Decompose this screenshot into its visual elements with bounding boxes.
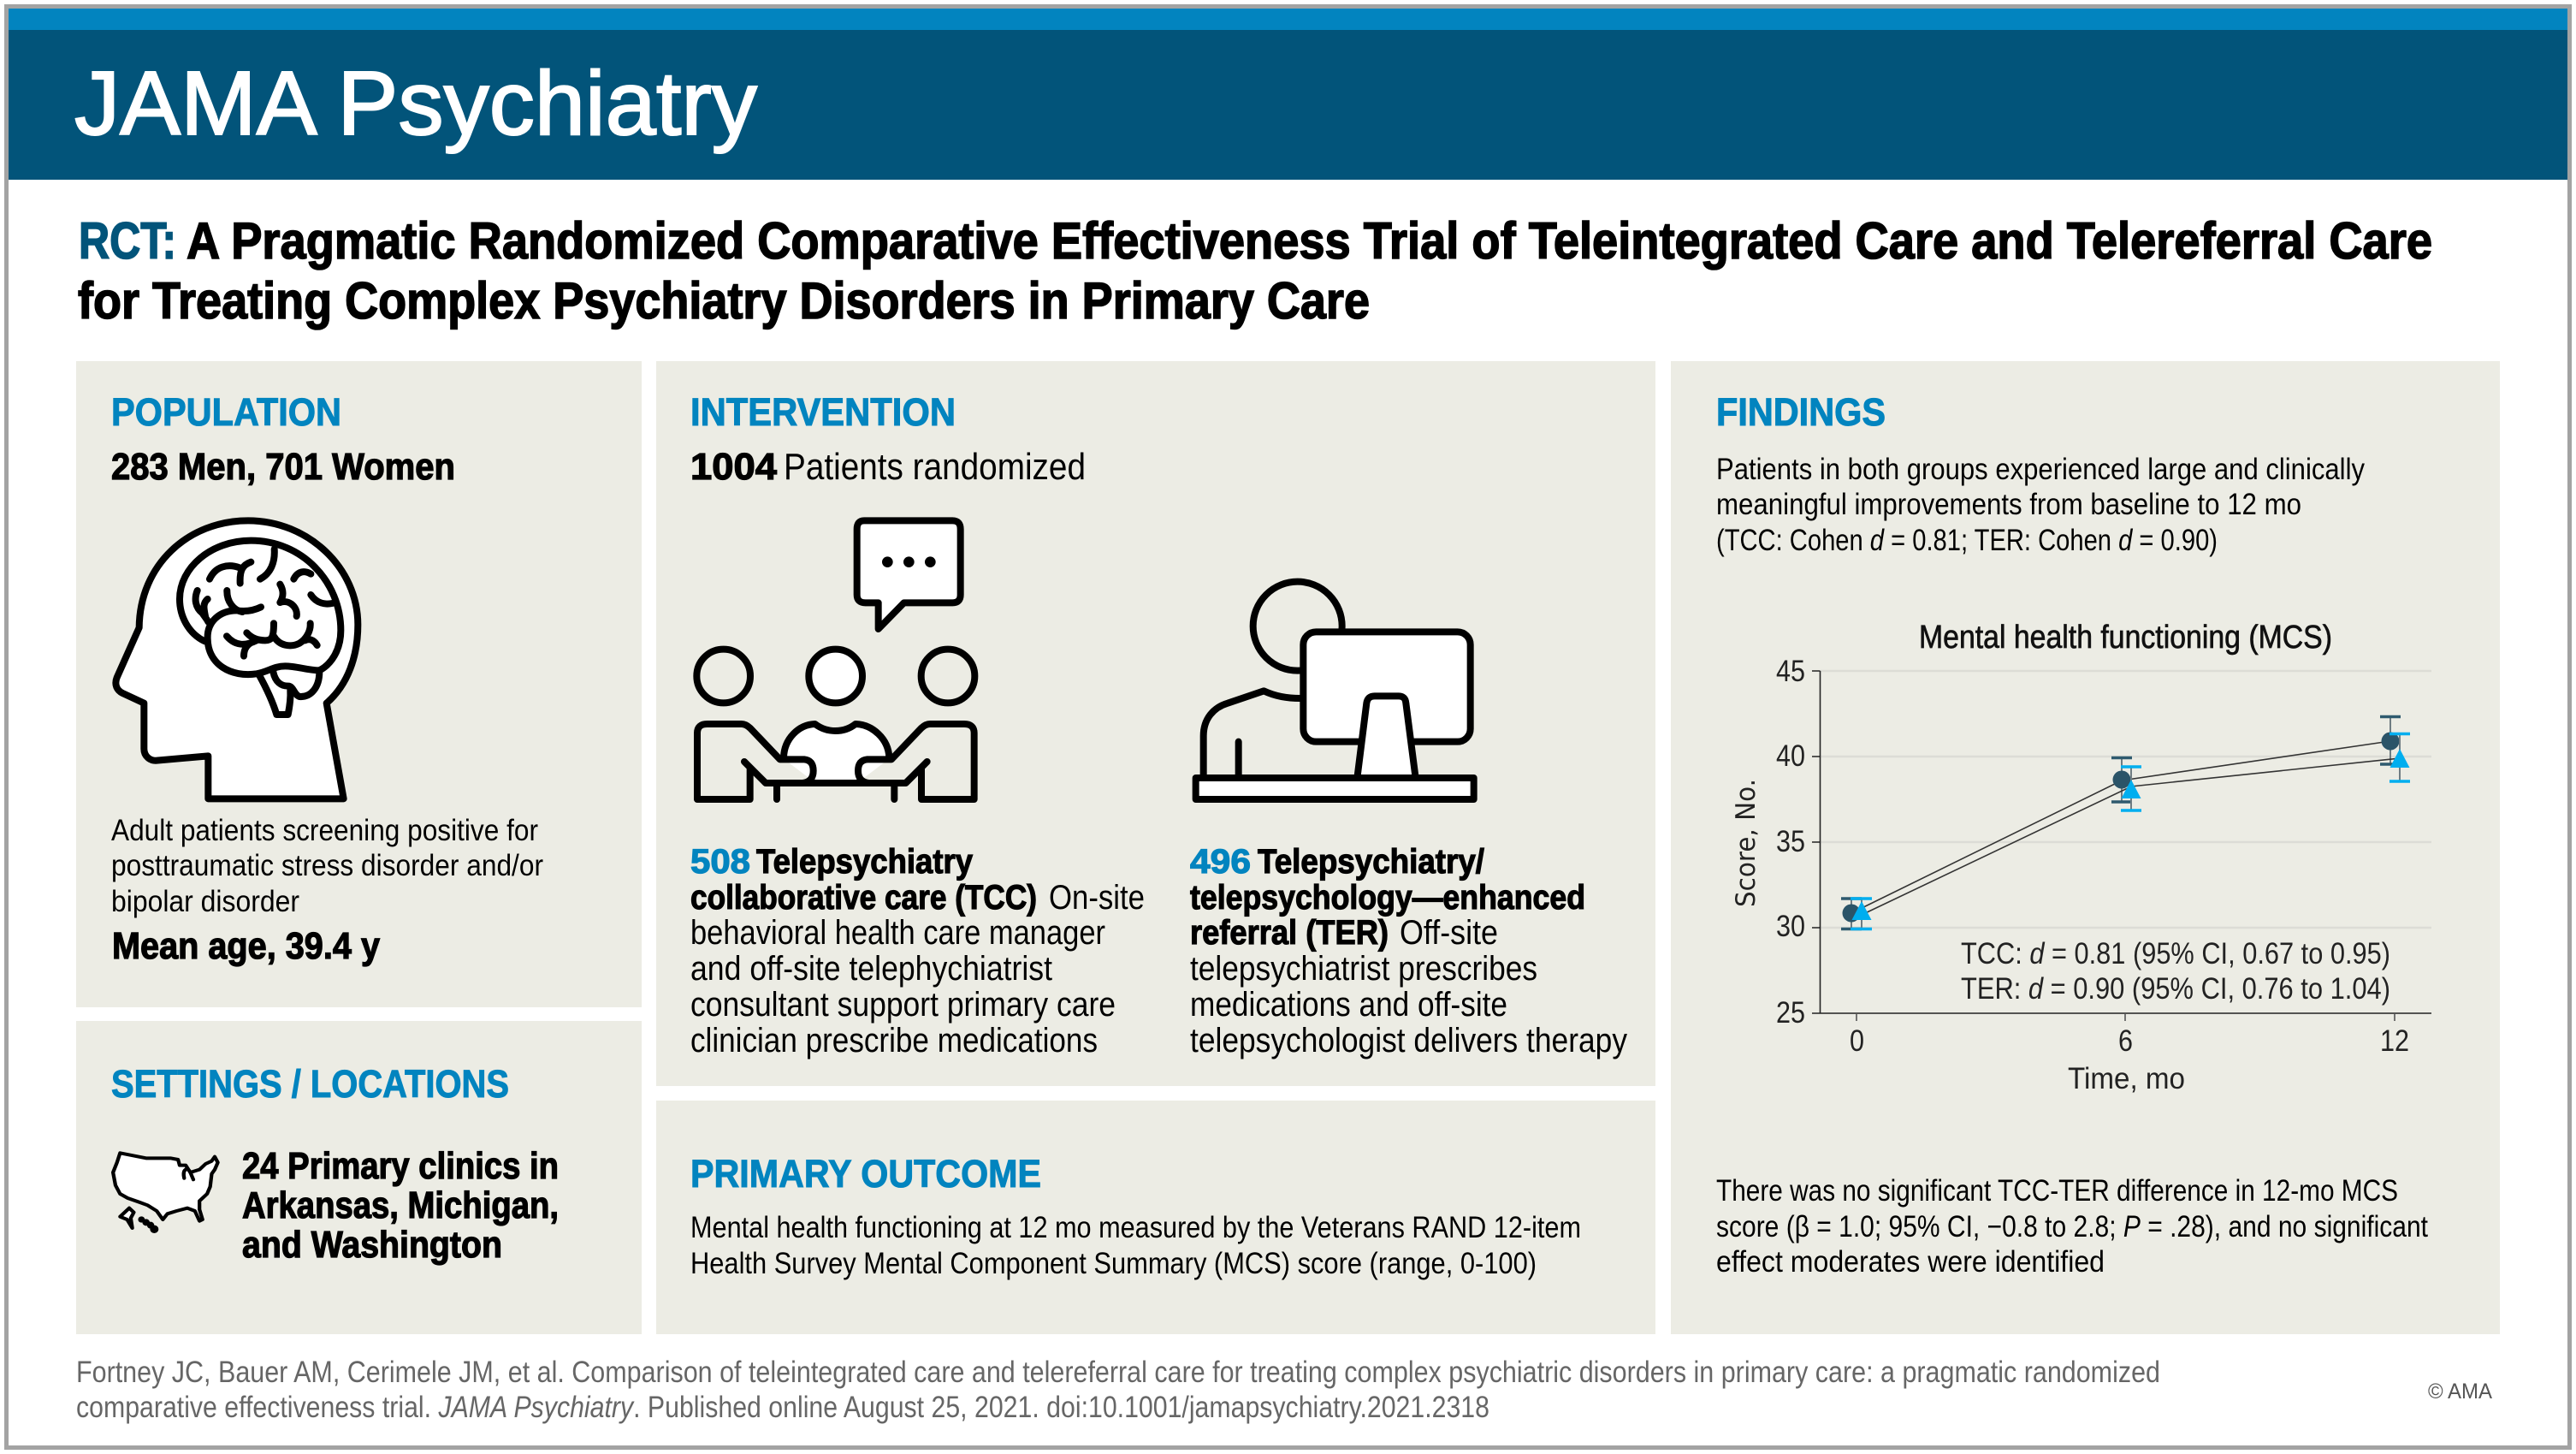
TER arm description: [1190, 843, 1627, 1059]
y axis labels: 25: [1776, 996, 1805, 1030]
y axis labels: 30: [1776, 910, 1805, 943]
title: RCT:: [79, 212, 176, 270]
patients randomized: 1004: [690, 446, 778, 488]
icon: three people at table with speech bubble: [696, 520, 974, 799]
TER arm description: Off-site: [1400, 914, 1498, 952]
panel: population: [76, 361, 642, 1007]
x axis labels: [1850, 1024, 2409, 1058]
chart title: Mental health functioning (MCS): [1919, 620, 2332, 656]
outcome description: [690, 1211, 1581, 1280]
effect size annotation: TER: d = 0.90 (95% CI, 0.76 to 1.04): [1961, 972, 2390, 1006]
TCC arm description: clinician prescribe medications: [690, 1022, 1098, 1059]
heading: findings: FINDINGS: [1716, 390, 1886, 434]
citation: comparative effectiveness trial. JAMA Psychiatry. Published online August 25, 2021. doi:10.1001/jamapsychiatry.2021.2318: [76, 1391, 1489, 1424]
TER arm description: 496: [1190, 843, 1251, 881]
population description: [111, 814, 543, 918]
y axis labels: 40: [1776, 739, 1805, 773]
panel: settings and locations: [76, 1021, 642, 1334]
TCC arm description: behavioral health care manager: [690, 914, 1105, 952]
icon: head with brain: [115, 520, 358, 798]
copyright: © AMA: [2428, 1380, 2492, 1404]
citation: [76, 1356, 2160, 1424]
TER arm description: medications and off-site: [1190, 986, 1507, 1024]
patients randomized: [690, 446, 1086, 488]
TCC arm description: collaborative care (TCC): [690, 879, 1037, 917]
y axis title: Score, No.: [1731, 779, 1762, 907]
panel: findings: [1671, 361, 2500, 1334]
findings summary: Patients in both groups experienced large and clinically: [1716, 453, 2365, 486]
chart axes: [1812, 671, 2431, 1021]
heading: primary outcome: PRIMARY OUTCOME: [690, 1152, 1041, 1196]
settings text: 24 Primary clinics in: [242, 1145, 559, 1187]
population description: posttraumatic stress disorder and/or: [111, 849, 543, 882]
outcome description: Mental health functioning at 12 mo measured by the Veterans RAND 12-item: [690, 1211, 1581, 1244]
TCC arm description: On-site: [1049, 879, 1145, 917]
settings text: and Washington: [242, 1224, 502, 1266]
TCC arm description: consultant support primary care: [690, 986, 1116, 1024]
heading: intervention: INTERVENTION: [690, 390, 956, 434]
y axis labels: 45: [1776, 655, 1805, 688]
findings conclusion: There was no significant TCC-TER difference in 12-mo MCS: [1716, 1174, 2398, 1208]
TER arm description: telepsychologist delivers therapy: [1190, 1022, 1627, 1059]
effect size annotation: TCC: d = 0.81 (95% CI, 0.67 to 0.95): [1961, 937, 2390, 970]
TER arm description: Telepsychiatry/: [1258, 843, 1484, 881]
x axis labels: 12: [2380, 1024, 2409, 1058]
TER series: [1851, 734, 2410, 929]
panel: primary outcome: [656, 1101, 1655, 1334]
TER arm description: telepsychiatrist prescribes: [1190, 950, 1537, 988]
y axis labels: [1776, 655, 1805, 1030]
findings summary: meaningful improvements from baseline to 12 mo: [1716, 488, 2301, 521]
findings conclusion: [1716, 1174, 2428, 1279]
y axis labels: 35: [1776, 825, 1805, 858]
outcome description: Health Survey Mental Component Summary (MCS) score (range, 0-100): [690, 1247, 1537, 1280]
TCC arm description: [690, 843, 1145, 1059]
heading: population: POPULATION: [111, 390, 341, 434]
TCC arm description: and off-site telephychiatrist: [690, 950, 1052, 988]
icon: US map: [113, 1153, 218, 1231]
population description: Adult patients screening positive for: [111, 814, 538, 847]
x axis labels: 6: [2118, 1024, 2133, 1058]
icon: person at computer: [1196, 582, 1474, 799]
title: [78, 212, 2432, 329]
title: for Treating Complex Psychiatry Disorders in Primary Care: [78, 272, 1370, 329]
heading: settings: SETTINGS / LOCATIONS: [111, 1062, 509, 1106]
header band: [9, 9, 2567, 180]
settings text: [242, 1145, 559, 1266]
findings conclusion: effect moderates were identified: [1716, 1245, 2105, 1279]
journal name: JAMA Psychiatry: [74, 53, 757, 154]
citation: Fortney JC, Bauer AM, Cerimele JM, et al. Comparison of teleintegrated care and telereferral care for treating complex psychiatric disorders in primary care: a pragmatic randomized: [76, 1356, 2160, 1389]
TCC arm description: 508: [690, 843, 750, 881]
panel: intervention: [656, 361, 1655, 1086]
line chart: mental health functioning: [1731, 620, 2431, 1095]
patients randomized: Patients randomized: [784, 446, 1086, 488]
x axis title: Time, mo: [2068, 1062, 2185, 1095]
effect size annotation: [1961, 937, 2390, 1006]
TER arm description: referral (TER): [1190, 914, 1389, 952]
x axis labels: 0: [1850, 1024, 1864, 1058]
TCC series: [1841, 717, 2401, 929]
population counts: 283 Men, 701 Women: [111, 446, 455, 488]
findings summary: [1716, 453, 2365, 557]
settings text: Arkansas, Michigan,: [242, 1184, 559, 1226]
mean age: Mean age, 39.4 y: [112, 925, 380, 967]
findings summary: (TCC: Cohen d = 0.81; TER: Cohen d = 0.90): [1716, 524, 2218, 557]
findings conclusion: score (β = 1.0; 95% CI, −0.8 to 2.8; P = .28), and no significant: [1716, 1210, 2428, 1243]
TCC arm description: Telepsychiatry: [756, 843, 974, 881]
TER arm description: telepsychology—enhanced: [1190, 879, 1585, 917]
population description: bipolar disorder: [111, 885, 299, 918]
